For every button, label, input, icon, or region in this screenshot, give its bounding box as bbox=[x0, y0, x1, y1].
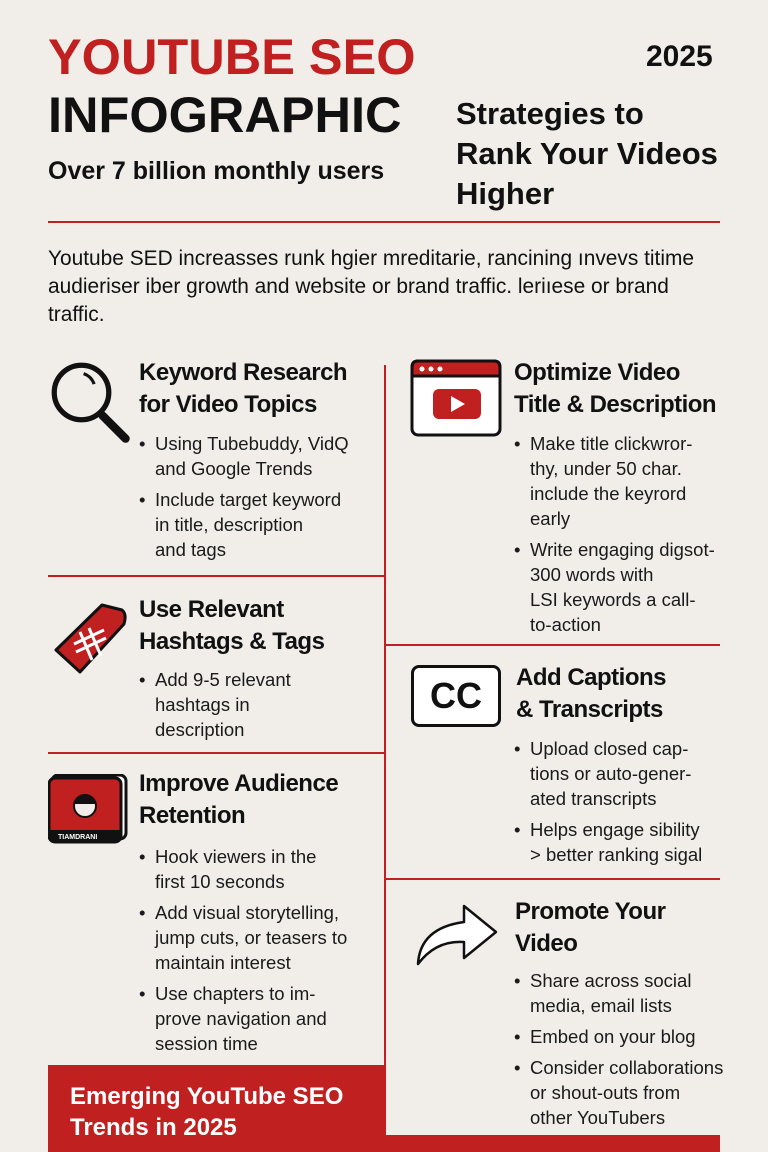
heading: Hashtags & Tags bbox=[139, 628, 324, 655]
bullets: ated transcripts bbox=[530, 788, 656, 809]
icon: magnifier bbox=[52, 362, 130, 443]
bullets: Make title clickwror- bbox=[530, 433, 692, 454]
heading: Promote Your bbox=[515, 898, 665, 925]
heading bbox=[514, 359, 716, 418]
bullets: and Google Trends bbox=[155, 458, 312, 479]
bullets: jump cuts, or teasers to bbox=[155, 927, 347, 948]
heading: Add Captions bbox=[516, 664, 666, 691]
heading: Optimize Video bbox=[514, 359, 680, 386]
panel: promote bbox=[416, 898, 723, 1128]
intro text bbox=[48, 247, 694, 326]
intro text: audieriser iber growth and website or brand traffic. leriıese or brand bbox=[48, 275, 669, 298]
heading: Use Relevant bbox=[139, 596, 284, 623]
tagline: Rank Your Videos bbox=[456, 136, 718, 171]
bullets: tions or auto-gener- bbox=[530, 763, 691, 784]
bullets: Add 9-5 relevant bbox=[155, 669, 291, 690]
panel: captions bbox=[411, 664, 702, 865]
bullets bbox=[140, 433, 349, 560]
intro text: traffic. bbox=[48, 303, 105, 326]
title bbox=[48, 28, 416, 143]
bullets: description bbox=[155, 719, 244, 740]
icon: video thumbnail bbox=[48, 774, 128, 844]
bullets bbox=[514, 433, 715, 635]
bullets: and tags bbox=[155, 539, 226, 560]
bullets: Hook viewers in the bbox=[155, 846, 316, 867]
panel: keyword research bbox=[52, 359, 349, 560]
bullets: include the keyrord bbox=[530, 483, 686, 504]
bullets: Share across social bbox=[530, 970, 691, 991]
bullets: > better ranking sigal bbox=[530, 844, 702, 865]
tagline: Strategies to bbox=[456, 96, 644, 131]
subtitle: Over 7 billion monthly users bbox=[48, 157, 384, 185]
icon: browser play bbox=[410, 360, 502, 436]
icon: share arrow bbox=[416, 904, 498, 966]
bullets: first 10 seconds bbox=[155, 871, 285, 892]
heading bbox=[516, 664, 666, 723]
heading bbox=[515, 898, 666, 957]
bullets: maintain interest bbox=[155, 952, 291, 973]
bullets: Upload closed cap- bbox=[530, 738, 688, 759]
bullets: other YouTubers bbox=[530, 1107, 665, 1128]
icon: tag bbox=[54, 604, 127, 674]
bullets: early bbox=[530, 508, 570, 529]
icon: video thumbnail: TIAMDRANI bbox=[58, 834, 97, 841]
bullets: Using Tubebuddy, VidQ bbox=[155, 433, 349, 454]
heading: Improve Audience bbox=[139, 770, 338, 797]
title: YOUTUBE SEO bbox=[48, 28, 416, 85]
bullets bbox=[140, 846, 347, 1054]
bullets: to-action bbox=[530, 614, 601, 635]
icon: CC bbox=[411, 665, 501, 727]
bullets: or shout-outs from bbox=[530, 1082, 680, 1103]
bullets: prove navigation and bbox=[155, 1008, 327, 1029]
heading: Video bbox=[515, 930, 577, 957]
callout: emerging trends: Trends in 2025 bbox=[70, 1114, 237, 1141]
bullets: in title, description bbox=[155, 514, 303, 535]
heading: Keyword Research bbox=[139, 359, 347, 386]
title: INFOGRAPHIC bbox=[48, 86, 402, 143]
year: 2025 bbox=[646, 40, 713, 73]
heading bbox=[139, 770, 338, 829]
bullets: Helps engage sibility bbox=[530, 819, 700, 840]
bullets: thy, under 50 char. bbox=[530, 458, 682, 479]
bullets: 300 words with bbox=[530, 564, 653, 585]
heading bbox=[139, 596, 324, 655]
bullets: Include target keyword bbox=[155, 489, 341, 510]
heading: Retention bbox=[139, 802, 245, 829]
bullets bbox=[514, 738, 702, 865]
callout: emerging trends: Emerging YouTube SEO bbox=[70, 1083, 343, 1110]
callout: emerging trends bbox=[48, 1065, 385, 1152]
bullets: LSI keywords a call- bbox=[530, 589, 696, 610]
panel: hashtags bbox=[54, 596, 324, 740]
icon: CC: CC bbox=[430, 675, 482, 716]
bullets: Embed on your blog bbox=[530, 1026, 696, 1047]
bullets: session time bbox=[155, 1033, 258, 1054]
panel: optimize title bbox=[410, 359, 716, 635]
heading bbox=[139, 359, 347, 418]
intro text: Youtube SED increasses runk hgier mreditarie, rancining ınvevs titime bbox=[48, 247, 694, 270]
bullets: media, email lists bbox=[530, 995, 672, 1016]
tagline bbox=[456, 96, 718, 211]
bullets bbox=[140, 669, 291, 740]
heading: & Transcripts bbox=[516, 696, 663, 723]
tagline: Higher bbox=[456, 176, 554, 211]
bullets bbox=[514, 970, 723, 1128]
bullets: Use chapters to im- bbox=[155, 983, 315, 1004]
bullets: Write engaging digsot- bbox=[530, 539, 715, 560]
panel: retention bbox=[48, 770, 347, 1054]
bullets: Add visual storytelling, bbox=[155, 902, 339, 923]
bullets: Consider collaborations bbox=[530, 1057, 723, 1078]
bullets: hashtags in bbox=[155, 694, 250, 715]
heading: for Video Topics bbox=[139, 391, 317, 418]
heading: Title & Description bbox=[514, 391, 716, 418]
